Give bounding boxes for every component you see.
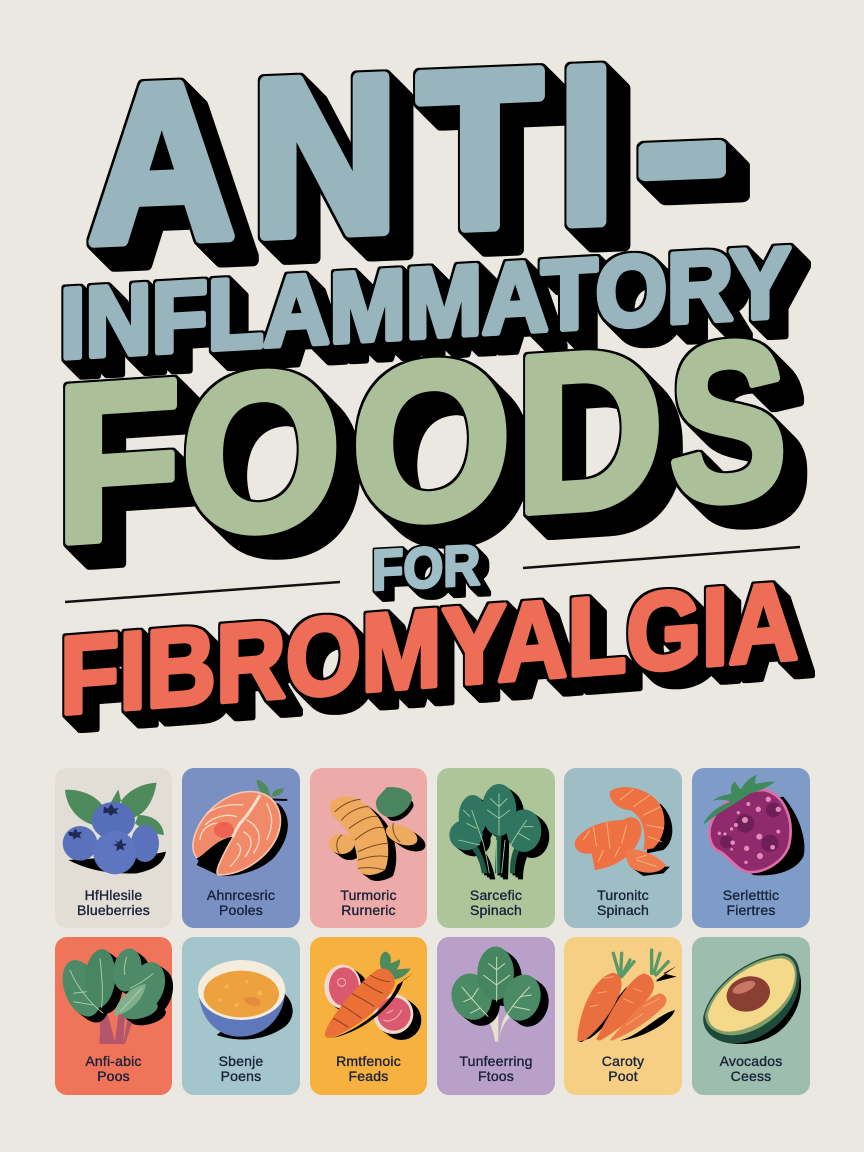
title line: FOODS: S bbox=[669, 292, 787, 551]
icon: leafy greens bbox=[55, 946, 172, 1044]
title line: ANTI-: - bbox=[635, 16, 730, 268]
label: HfHlesile bbox=[85, 887, 142, 903]
panel: card 9 carrot and beets bbox=[310, 937, 427, 1095]
label: Sbenje bbox=[219, 1053, 263, 1069]
panel: card 11 carrots bbox=[564, 937, 682, 1095]
title line: FIBROMYALGIA: FIBROMYALGIA bbox=[60, 559, 798, 737]
title line: FOR: FOR bbox=[372, 534, 480, 603]
icon: carrot and beets bbox=[324, 952, 413, 1038]
label: Avocados bbox=[720, 1053, 782, 1069]
icon: spinach bunch bbox=[449, 784, 541, 873]
icon: blueberries bbox=[63, 783, 166, 874]
divider line: left bbox=[65, 582, 340, 602]
label: Poot bbox=[608, 1068, 638, 1084]
label: Serletttic bbox=[723, 887, 779, 903]
label: Feads bbox=[349, 1068, 388, 1084]
label: Rmtfenoic bbox=[336, 1053, 401, 1069]
label: Ftoos bbox=[478, 1068, 514, 1084]
label: Poos bbox=[97, 1068, 130, 1084]
icon: turmeric root bbox=[329, 787, 420, 875]
label: Ceess bbox=[731, 1068, 771, 1084]
panel: card 2 salmon bbox=[182, 768, 300, 928]
panel: card 7 greens bbox=[55, 937, 172, 1095]
icon: carrots bbox=[577, 950, 677, 1042]
title line: INFLAMMATORY: INFLAMMATORY bbox=[60, 228, 791, 380]
icon: purple berry bbox=[703, 775, 804, 875]
label: Tunfeerring bbox=[459, 1053, 533, 1069]
title line: ANTI-: ANTI bbox=[89, 20, 615, 289]
panel: card 1 blueberries bbox=[55, 768, 172, 928]
panel: card 12 avocado bbox=[692, 937, 810, 1095]
title line: FOODS: FOOD bbox=[55, 300, 664, 590]
label: Pooles bbox=[219, 902, 263, 918]
label: Fiertres bbox=[726, 902, 776, 918]
icon: three leaf sprig bbox=[446, 947, 546, 1042]
icon: avocado half bbox=[703, 953, 801, 1044]
label: Spinach bbox=[470, 902, 522, 918]
label: Anfi-abic bbox=[85, 1053, 142, 1069]
panel: card 8 bowl bbox=[182, 937, 300, 1095]
icon: soup bowl bbox=[198, 960, 293, 1040]
label: Rurneric bbox=[341, 902, 396, 918]
panel: card 6 berry bbox=[692, 768, 810, 928]
panel: card 4 spinach bbox=[437, 768, 555, 928]
label: Poens bbox=[221, 1068, 261, 1084]
panel: card 5 salmon pieces bbox=[564, 768, 682, 928]
label: Turmoric bbox=[340, 887, 397, 903]
label: Spinach bbox=[597, 902, 649, 918]
panel: card 3 turmeric bbox=[310, 768, 427, 928]
label: Blueberries bbox=[77, 902, 150, 918]
label: Ahnrcesric bbox=[207, 887, 275, 903]
icon: salmon steak bbox=[193, 779, 288, 876]
icon: salmon pieces bbox=[575, 787, 672, 876]
label: Turonitc bbox=[597, 887, 649, 903]
label: Sarcefic bbox=[470, 887, 522, 903]
panel: card 10 three leaves bbox=[437, 937, 555, 1095]
label: Caroty bbox=[602, 1053, 644, 1069]
divider line: right bbox=[523, 547, 800, 568]
